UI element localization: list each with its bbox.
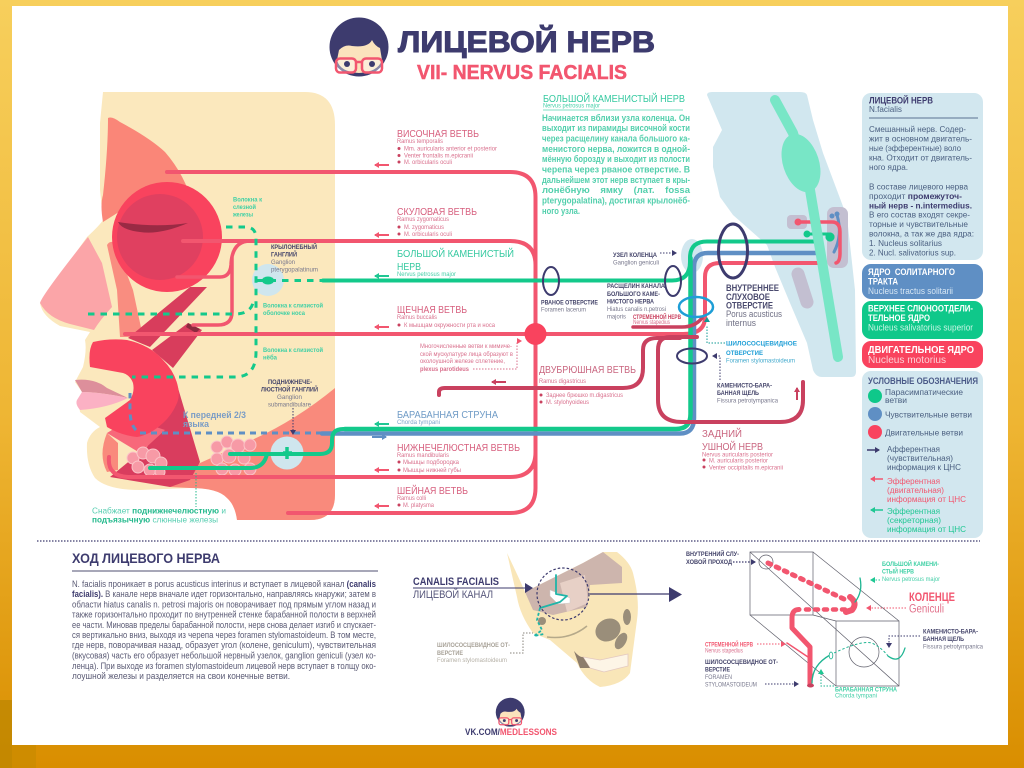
sidebar: legend: Двигательные ветви	[885, 428, 963, 438]
label: canalis facialis: ЛИЦЕВОЙ КАНАЛ	[413, 588, 493, 601]
sidebar: facial nerve description: В его состав входят секре-	[869, 210, 970, 220]
label: greater petrosal: БОЛЬШОЙ КАМЕНИ-	[882, 560, 939, 568]
nasal mucosa fibers label: Волокна к слизистой	[263, 302, 323, 310]
footer link: VK.COM/MEDLESSONS	[465, 727, 557, 738]
label: posterior auricular nerve: Venter occipitalis m.epicranii	[709, 466, 783, 472]
label: internal acoustic meatus: ВНУТРЕННИЙ СЛУ-	[686, 550, 739, 558]
label: digastric branch: ДВУБРЮШНАЯ ВЕТВЬ	[539, 364, 636, 376]
label: hiatus canalis: БОЛЬШОГО КАМЕ-	[607, 292, 660, 298]
label: canalis facialis: CANALIS FACIALIS	[413, 576, 499, 588]
label: cervical branch: M. platysma	[403, 503, 435, 509]
nerve: facial red branches	[109, 172, 823, 513]
facial canal dotted	[768, 563, 846, 600]
submandibular ganglion label: submandibulare	[268, 402, 312, 408]
label: stylomastoid: ВЕРСТИЕ	[705, 668, 730, 674]
sidebar: solitary tract nucleus: ЯДРО СОЛИТАРНОГО	[868, 267, 955, 277]
submandibular ganglion label: ЛЮСТНОЙ ГАНГЛИЙ	[261, 386, 318, 394]
nucleus connections	[834, 215, 839, 252]
label: mandibular branch: Ramus mandibularis	[397, 453, 449, 459]
sidebar: solitary tract nucleus: Nucleus tractus solitarii	[868, 286, 953, 296]
label: internal acoustic opening: Porus acusticus	[726, 309, 782, 319]
label: chorda tympani: Chorda tympani	[397, 420, 440, 426]
label: temporal branch: Mm. auricularis anterior et posterior	[404, 146, 497, 152]
branch arrows	[372, 165, 797, 506]
sidebar: facial nerve description: 2. Nucl. salivatorius sup.	[869, 248, 956, 258]
title: ЛИЦЕВОЙ НЕРВ	[398, 25, 655, 59]
text block: course description: (вкусовая) часть его образует небольшой нервный узелок, ganglion geniculi (узел ко-	[72, 650, 376, 660]
label: digastric branch: M. stylohyoideus	[546, 400, 589, 406]
note: plexus parotideus: околоушной железе сплетение,	[420, 358, 505, 365]
tongue label: языка	[183, 419, 210, 430]
medulla nerve	[775, 100, 838, 357]
label: geniculum	[867, 590, 955, 616]
geometric canal diagram	[750, 552, 905, 688]
sidebar: legend: (секреторная)	[887, 515, 941, 525]
text block: course description: также горизонтально проходит по внутренней стенке барабанной полости в верхней	[72, 610, 376, 620]
label: geniculate ganglion: УЗЕЛ КОЛЕНЦА	[613, 253, 658, 259]
label: internal acoustic opening: ВНУТРЕННЕЕ	[726, 283, 779, 293]
label: internal acoustic meatus: ХОВОЙ ПРОХОД	[686, 558, 733, 566]
text block: course description: лоушной железы и разделяется на свои конечные ветви.	[72, 671, 290, 681]
salivary glands label: подъязычную слюнные железы	[92, 514, 218, 524]
text block: greater petrosal nerve: черепа через рваное отверстие. В	[542, 164, 690, 176]
label: stylomastoid: STYLOMASTOIDEUM	[705, 682, 757, 688]
label: hiatus canalis: majoris	[607, 314, 626, 320]
label: internal acoustic opening: ОТВЕРСТИЕ	[726, 300, 773, 310]
nasal muscle	[107, 242, 143, 337]
label: chorda tympani	[821, 670, 898, 700]
neck area	[170, 388, 335, 520]
label: petrotympanic: БАННАЯ ЩЕЛЬ	[923, 637, 965, 643]
lacrimal fibers label: слезной	[233, 204, 256, 211]
lacrimal fibers label	[232, 198, 262, 218]
label: petrotympanic fissure: Fissura petrotympanica	[717, 398, 779, 404]
diagram labels	[686, 550, 984, 700]
section heading: course of the nerve: ХОД ЛИЦЕВОГО НЕРВА	[72, 550, 220, 566]
label: posterior auricular nerve: УШНОЙ НЕРВ	[702, 440, 763, 453]
logo: top	[330, 18, 388, 76]
note: plexus parotideus	[420, 341, 521, 373]
text block: greater petrosal nerve: через расщелину канала большого ка-	[542, 134, 690, 144]
text block: course description: области hiatus canalis n. petrosi majoris он поворачивает под прямым углом назад и	[72, 600, 376, 610]
label: stapedial: СТРЕМЕННОЙ НЕРВ	[705, 640, 754, 648]
label: internal acoustic opening: internus	[726, 318, 756, 328]
text block: course description: N. facialis проникает в porus acusticus interinus и вступает в лицевой канал (canalis	[72, 579, 376, 589]
text block: greater petrosal nerve: лонёбную ямку (лат. fossa	[542, 185, 691, 196]
nuclei	[787, 215, 807, 229]
label: chorda tympani	[397, 409, 498, 426]
text block: greater petrosal nerve: менистого нерва, ложится в одной-	[542, 144, 690, 155]
label: greater petrosal nerve: НЕРВ	[397, 261, 421, 273]
label: geniculate ganglion: Ganglion geniculi	[613, 260, 659, 266]
mouth muscle	[89, 339, 179, 437]
jaw muscle	[110, 388, 200, 487]
label: greater petrosal nerve	[397, 247, 514, 278]
text block: greater petrosal nerve: дальнейшем этот нерв вступает в кры-	[542, 175, 690, 186]
label: digastric branch	[539, 364, 636, 406]
forehead muscle	[102, 118, 193, 222]
sidebar: facial nerve description: ный нерв - n.intermedius.	[869, 200, 972, 210]
lips	[75, 380, 128, 398]
zygomatic muscles	[128, 287, 207, 347]
label: stylomastoid foramen: ШИЛОСОСЦЕВИДНОЕ	[726, 342, 797, 348]
label: petrotympanic fissure: КАМЕНИСТО-БАРА-	[717, 384, 772, 390]
label: posterior auricular nerve: Nervus auricularis posterior	[702, 452, 773, 458]
label: internal acoustic meatus	[686, 550, 755, 566]
glands	[127, 436, 256, 477]
label: buccal branch: ЩЕЧНАЯ ВЕТВЬ	[397, 304, 467, 316]
label: hiatus canalis: Hiatus canalis n.petrosi	[607, 307, 666, 313]
nasal mucosa fibers label	[263, 302, 323, 317]
label: stapedial nerve: Nervus stapedius	[633, 320, 670, 326]
label: stylomastoid foramen: ОТВЕРСТИЕ	[726, 351, 763, 357]
label: hiatus canalis: РАСЩЕЛИН КАНАЛА	[607, 284, 666, 290]
label: petrotympanic: Fissura petrotympanica	[923, 644, 984, 650]
text block: greater petrosal nerve: БОЛЬШОЙ КАМЕНИСТЫЙ НЕРВ	[543, 92, 685, 105]
brainstem panel	[681, 92, 856, 377]
label: canalis facialis	[413, 576, 499, 601]
sidebar: motor nucleus	[862, 341, 983, 368]
pterygopalatine ganglion label: pterygopalatinum	[271, 268, 318, 274]
sidebar: legend: информация от ЦНС	[887, 494, 966, 504]
nerve: digastric, auricular and stapedial	[439, 318, 803, 422]
label: chorda tympani: БАРАБАННАЯ СТРУНА	[835, 688, 898, 694]
text block: course description: ся вертикально вниз, выходя из черепа через foramen stylomastoideum. В том месте,	[72, 630, 376, 640]
label: stylomastoid: ШИЛОСОСЦЕВИДНОЕ ОТ-	[705, 660, 778, 666]
label: petrotympanic: КАМЕНИСТО-БАРА-	[923, 630, 978, 636]
sidebar: legend: информация к ЦНС	[887, 462, 961, 472]
label: mandibular branch: НИЖНЕЧЕЛЮСТНАЯ ВЕТВЬ	[397, 442, 520, 454]
label: mandibular branch: Мышцы нижней губы	[403, 467, 461, 474]
tongue label	[183, 410, 246, 430]
title	[398, 25, 655, 84]
ganglia	[252, 264, 284, 296]
palate fibers label: Волокна к слизистой	[263, 347, 323, 354]
pterygopalatine ganglion label: КРЫЛОНЕБНЫЙ	[271, 243, 317, 251]
sidebar: legend: Эфферентная	[887, 506, 940, 516]
title: VII- NERVUS FACIALIS	[417, 61, 627, 84]
sidebar: motor nucleus: ДВИГАТЕЛЬНОЕ ЯДРО	[868, 345, 974, 356]
label: buccal branch: Ramus buccalis	[397, 315, 437, 321]
lacrimal fibers label: железы	[232, 212, 253, 218]
label: temporal branch: Venter frontalis m.epicranii	[404, 154, 473, 160]
label: digastric branch: Заднее брюшко m.digastricus	[546, 393, 623, 399]
text block: course description	[72, 579, 376, 681]
label: posterior auricular nerve: ЗАДНИЙ	[702, 427, 742, 440]
label: internal acoustic opening: СЛУХОВОЕ	[726, 292, 770, 302]
pterygopalatine ganglion label: ГАНГЛИЙ	[271, 250, 297, 258]
tongue label: К передней 2/3	[183, 410, 246, 421]
sidebar: legend	[862, 371, 983, 538]
pterygopalatine ganglion label	[271, 243, 318, 274]
text block: greater petrosal nerve: Начинается вблизи узла коленца. Он	[542, 113, 690, 124]
label: stapedial nerve: СТРЕМЕННОЙ НЕРВ	[633, 313, 682, 321]
label: greater petrosal nerve: Nervus petrosus major	[397, 272, 456, 278]
label: greater petrosal	[871, 560, 940, 583]
label: skull stylomastoid foramen: ШИЛОСОСЦЕВИДНОЕ ОТ-	[437, 643, 510, 649]
nasal mucosa fibers label: оболочке носа	[263, 310, 306, 317]
label: stapedial	[705, 640, 785, 654]
sidebar: facial nerve description: волокна, а так же два ядра:	[869, 228, 974, 238]
label: stapedial nerve	[633, 313, 682, 326]
text block: greater petrosal nerve	[542, 92, 691, 217]
sidebar: solitary tract nucleus: ТРАКТА	[868, 276, 899, 286]
sidebar: facial nerve description: 1. Nucleus solitarius	[869, 238, 942, 248]
palate fibers label: нёба	[263, 354, 278, 362]
text block: greater petrosal nerve: ного узла.	[542, 206, 580, 217]
submandibular ganglion label	[261, 380, 318, 434]
arrow: canal to skull	[413, 583, 533, 593]
text block: greater petrosal nerve: мённую борозду и выходит из полости	[542, 154, 690, 165]
sidebar: facial nerve description	[862, 93, 983, 260]
label: zygomatic branch: M. zygomaticus	[404, 225, 444, 231]
label: posterior auricular nerve	[702, 427, 783, 472]
chorda and petrosal	[855, 578, 861, 602]
sidebar: legend: Чувствительные ветви	[885, 410, 972, 420]
facial canal solid	[792, 610, 810, 684]
label: stylomastoid foramen: Foramen stylomastoideum	[726, 358, 795, 364]
sidebar: facial nerve description: Смешанный нерв. Содер-	[869, 124, 966, 134]
lacrimal fibers label: Волокна к	[233, 198, 262, 204]
logo: footer	[496, 698, 525, 727]
label: cervical branch: Ramus colli	[397, 496, 426, 502]
label: stylomastoid	[705, 660, 798, 688]
sidebar: superior salivatory nucleus: ВЕРХНЕЕ СЛЮНООТДЕЛИ-	[868, 304, 973, 314]
label: temporal branch	[397, 128, 497, 166]
note: plexus parotideus: ской мускулатуре лица образуют в	[420, 351, 513, 358]
sidebar: facial nerve description: проходит промежуточ-	[869, 191, 962, 201]
sidebar: facial nerve description: кна. Отходит от двигатель-	[869, 152, 972, 162]
label: petrotympanic fissure: БАННАЯ ЩЕЛЬ	[717, 391, 760, 397]
label: mandibular branch	[397, 442, 520, 474]
sidebar: legend: Парасимпатические	[885, 387, 963, 397]
nerve: chorda tympani	[130, 253, 820, 468]
note: plexus parotideus: plexus parotideus	[420, 367, 470, 373]
label: zygomatic branch	[397, 206, 477, 238]
label: zygomatic branch: Ramus zygomaticus	[397, 217, 449, 223]
label: skull stylomastoid foramen: ВЕРСТИЕ	[437, 651, 463, 657]
label: stylomastoid foramen	[704, 317, 797, 380]
sidebar: superior salivatory nucleus: ТЕЛЬНОЕ ЯДРО	[868, 313, 930, 323]
text block: course description: ленца). При выходе из foramen stylomastoideum лицевой нерв вступает в толщу око-	[72, 661, 376, 671]
sidebar: facial nerve description: жит в основном двигатель-	[869, 134, 972, 144]
sidebar: facial nerve description: ного ядра.	[869, 162, 908, 172]
text block: greater petrosal nerve: Nervus petrosus major	[543, 104, 600, 110]
pterygopalatine ganglion label: Ganglion	[271, 260, 295, 266]
label: petrotympanic fissure	[717, 384, 779, 404]
label: mandibular branch: Мышцы подбородка	[403, 460, 460, 466]
sidebar: legend: Афферентная	[887, 444, 940, 454]
label: skull stylomastoid foramen: Foramen stylomastoideum	[437, 658, 507, 664]
submandibular ganglion label: ПОДНИЖНЕЧЕ-	[268, 380, 312, 386]
nose	[40, 237, 112, 330]
sidebar: facial nerve description: N.facialis	[869, 104, 902, 114]
label: digastric branch: Ramus digastricus	[539, 379, 586, 385]
foramina ellipses	[543, 224, 748, 364]
face illustration	[40, 92, 335, 520]
label: chorda tympani: БАРАБАННАЯ СТРУНА	[397, 409, 498, 421]
palate fibers label	[263, 347, 323, 362]
face labels	[92, 198, 323, 524]
sidebar: legend: ветви	[885, 395, 907, 405]
label: geniculum: Geniculi	[909, 604, 944, 616]
label: skull stylomastoid foramen	[437, 633, 533, 664]
text block: course description: ее части. Миновав пределы барабанной полости, нерв снова делает изгиб и спускает-	[72, 620, 376, 630]
submandibular ganglion label: Ganglion	[277, 395, 302, 401]
skull illustration	[507, 552, 638, 687]
arrow: skull to diagram	[590, 587, 682, 602]
label: chorda tympani: Chorda tympani	[835, 694, 877, 700]
note: plexus parotideus: Многочисленные ветви к мимиче-	[420, 344, 512, 350]
label: cervical branch: ШЕЙНАЯ ВЕТВЬ	[397, 484, 468, 497]
text block: greater petrosal nerve: pterygopalatina), достигая крылонёб-	[542, 196, 690, 206]
label: cervical branch	[397, 484, 468, 509]
sidebar: solitary tract nucleus	[862, 264, 983, 299]
label: hiatus canalis: НИСТОГО НЕРВА	[607, 300, 655, 306]
sidebar: legend: Эфферентная	[887, 476, 940, 486]
label: temporal branch: ВИСОЧНАЯ ВЕТВЬ	[397, 128, 479, 140]
label: posterior auricular nerve: M. auricularis posterior	[709, 458, 768, 464]
label: foramen lacerum: РВАНОЕ ОТВЕРСТИЕ	[541, 300, 598, 306]
node: plexus parotideus	[524, 323, 546, 345]
salivary glands label	[92, 473, 226, 524]
label: geniculate ganglion	[613, 253, 676, 266]
text block: course description: facialis). В канале нерв вначале идет горизонтально, направляясь кнаружи; затем в	[72, 589, 376, 599]
label: foramen lacerum	[541, 300, 598, 314]
label: greater petrosal nerve: БОЛЬШОЙ КАМЕНИСТЫЙ	[397, 247, 514, 260]
label: greater petrosal: СТЫЙ НЕРВ	[882, 568, 915, 576]
sidebar: superior salivatory nucleus: Nucleus salivatorius superior	[868, 322, 973, 332]
label: greater petrosal: Nervus petrosus major	[882, 577, 940, 583]
sidebar: legend: (чувствительная)	[887, 453, 953, 463]
label: buccal branch: К мышцам окружности рта и носа	[404, 323, 496, 329]
label: stylomastoid: FORAMEN	[705, 675, 732, 681]
label: zygomatic branch: СКУЛОВАЯ ВЕТВЬ	[397, 206, 477, 218]
sidebar: facial nerve description: ные (эфферентные) воло	[869, 143, 961, 153]
label: temporal branch: M. orbicularis oculi	[404, 160, 452, 166]
label: geniculum: КОЛЕНЦЕ	[909, 590, 955, 604]
label: stapedial: Nervus stapedius	[705, 648, 743, 654]
salivary glands label: Снабжает поднижнечелюстную и	[92, 506, 226, 516]
text block: course description: где нерв, поворачивая назад, образует угол (колене, geniculum), чувствительная	[72, 640, 376, 650]
sidebar: legend: УСЛОВНЫЕ ОБОЗНАЧЕНИЯ	[868, 376, 978, 386]
chin muscle	[102, 433, 118, 472]
label: zygomatic branch: M. orbicularis oculi	[404, 232, 452, 238]
sidebar: facial nerve description: В составе лицевого нерва	[869, 182, 968, 192]
sidebar: legend: (двигательная)	[887, 485, 944, 495]
sidebar: facial nerve description: торные и чувствительные	[869, 219, 968, 229]
sidebar: superior salivatory nucleus	[862, 301, 983, 339]
label: internal acoustic opening	[726, 283, 782, 328]
label: foramen lacerum: Foramen lacerum	[541, 308, 586, 314]
sidebar: facial nerve description: ЛИЦЕВОЙ НЕРВ	[869, 94, 933, 106]
label: temporal branch: Ramus temporalis	[397, 139, 443, 145]
label: hiatus canalis	[607, 284, 666, 320]
sidebar: legend: информация от ЦНС	[887, 524, 966, 534]
text block: greater petrosal nerve: выходит из пирамиды височной кости	[542, 123, 690, 134]
label: buccal branch	[397, 304, 496, 329]
nerve: petrosal green	[88, 227, 820, 377]
sidebar: motor nucleus: Nucleus motorius	[868, 355, 946, 366]
label: petrotympanic	[889, 630, 984, 650]
orbicularis of eye	[112, 182, 222, 292]
